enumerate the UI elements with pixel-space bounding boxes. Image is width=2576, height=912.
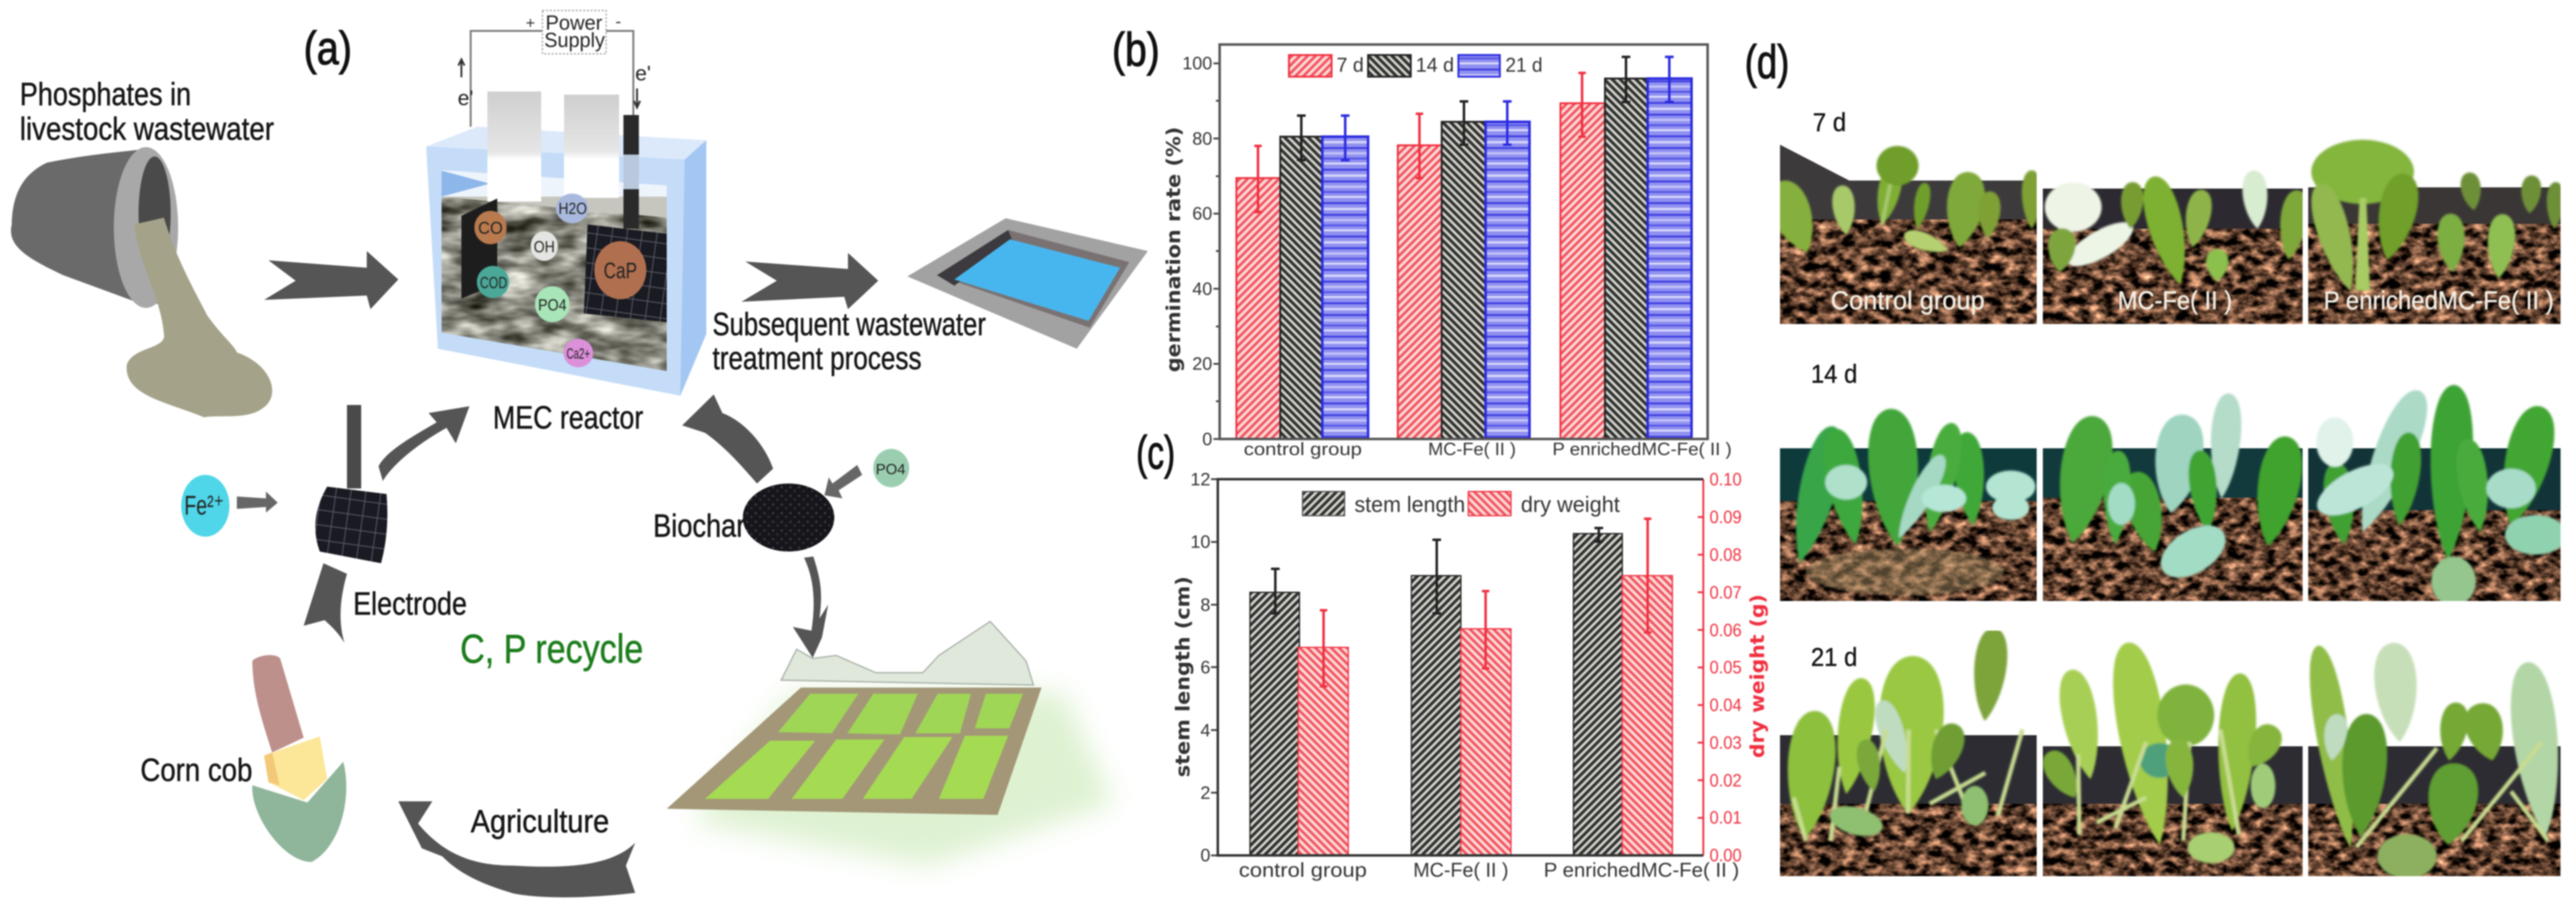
molecule: Ca2+: Ca2+	[567, 346, 590, 362]
photo: 14 d MC-Fe(II)	[2043, 393, 2308, 601]
photo: 14 d P enriched MC-Fe(II)	[2308, 383, 2567, 606]
plot frame	[1220, 45, 1708, 439]
power supply and wires	[458, 11, 651, 127]
molecule: COD	[477, 266, 509, 298]
photo: 21 d P enriched MC-Fe(II)	[2303, 641, 2568, 879]
panel label (d): (d)	[1745, 36, 1789, 88]
power supply and wires: Power	[546, 11, 602, 34]
bars: P enriched MC-Fe(II)	[1573, 519, 1672, 855]
legend: 21 d	[1505, 54, 1543, 76]
panel label (c): (c)	[1136, 427, 1175, 479]
legend: stem length	[1354, 492, 1465, 517]
x axis labels	[1244, 440, 1732, 459]
right y axis in red: 0.06	[1709, 621, 1742, 641]
y axis ticks: 60	[1192, 204, 1212, 224]
right y axis in red: 0.09	[1709, 508, 1742, 527]
left y axis ticks	[1191, 470, 1218, 866]
icon: corn cob	[252, 655, 346, 862]
icon: treatment pond	[907, 218, 1148, 349]
legend: 14 d	[1416, 54, 1454, 76]
icon: Fe2+ ion: Fe²⁺	[184, 490, 224, 521]
molecule: CaP: CaP	[604, 258, 637, 283]
icon: Fe2+ ion	[181, 475, 229, 537]
photo: 21 d control group	[1780, 626, 2037, 876]
bars: control group	[1236, 116, 1368, 439]
label: subsequent wastewater treatment process: treatment process	[712, 341, 922, 377]
arrow: Fe2+ to electrode	[237, 492, 278, 513]
label: 7 d: 7 d	[1813, 108, 1846, 137]
caption: MC-Fe( II )	[2118, 286, 2232, 315]
bars: MC-Fe(II)	[1398, 101, 1530, 439]
legend: dry weight	[1521, 492, 1620, 517]
y axis ticks: 0	[1202, 430, 1212, 450]
molecule: COD: COD	[480, 273, 507, 292]
x axis labels: control group	[1244, 440, 1362, 459]
bars: control group	[1250, 569, 1348, 855]
left y axis ticks: 4	[1200, 721, 1210, 741]
label: MEC reactor: MEC reactor	[493, 400, 643, 436]
right y axis in red: 0.07	[1709, 583, 1742, 603]
label: phosphates in livestock wastewater: livestock wastewater	[20, 111, 274, 147]
molecule: CO2	[474, 211, 507, 244]
legend	[1303, 492, 1620, 517]
icon: biochar	[743, 484, 834, 552]
arrow: biochar to field	[793, 556, 828, 658]
molecule: H2O	[556, 194, 588, 223]
right y axis in red: 0.00	[1709, 846, 1742, 866]
caption: P enrichedMC-Fe( II )	[2324, 286, 2554, 315]
panel: (b) germination rate chart	[1112, 23, 1732, 459]
label: phosphates in livestock wastewater	[20, 77, 274, 147]
right y axis in red: 0.04	[1709, 696, 1742, 715]
power supply and wires: Supply	[544, 28, 605, 51]
icon: PO4 ion	[873, 449, 909, 487]
icon: mesh electrode	[315, 405, 387, 563]
photo: 7 d MC-Fe(II)	[2043, 169, 2312, 324]
left y axis ticks: 6	[1200, 658, 1210, 678]
icon: wastewater pipe	[11, 147, 272, 417]
left y axis ticks: 12	[1191, 470, 1210, 490]
photo: 21 d MC-Fe(II)	[2037, 639, 2303, 876]
arrow: electrode to reactor	[379, 406, 469, 481]
right y axis in red: 0.02	[1709, 771, 1742, 791]
left y axis ticks: 2	[1200, 783, 1210, 803]
label: phosphates in livestock wastewater: Phosphates in	[20, 77, 191, 113]
photo: 14 d control group	[1780, 407, 2037, 601]
molecule: OH	[531, 231, 558, 261]
arrow: reactor to biochar	[682, 394, 773, 484]
molecule: Ca2+	[563, 339, 593, 367]
left y axis ticks: 10	[1191, 532, 1210, 552]
right y axis in red: 0.05	[1709, 658, 1742, 678]
y axis ticks	[1183, 54, 1220, 450]
label: C, P recycle: C, P recycle	[460, 626, 643, 671]
icon: MEC reactor tank	[426, 92, 706, 396]
panel: (a) MEC recycling schematic	[11, 11, 1148, 897]
right y axis in red: 0.01	[1709, 808, 1742, 828]
right y axis in red: 0.10	[1709, 470, 1742, 490]
molecule: CaP	[594, 241, 646, 299]
molecule: OH: OH	[534, 237, 555, 256]
y axis ticks: 100	[1183, 54, 1212, 74]
photo: 7 d P enriched MC-Fe(II)	[2304, 140, 2565, 324]
x axis labels: MC-Fe( II )	[1428, 440, 1516, 459]
label: 21 d: 21 d	[1811, 642, 1857, 671]
legend	[1289, 54, 1543, 77]
arrow: corn cob to electrode	[304, 563, 347, 643]
arrow: PO4 to biochar	[824, 465, 862, 498]
power supply and wires: e'	[458, 87, 473, 110]
label: 14 d: 14 d	[1811, 359, 1857, 388]
x axis labels: MC-Fe( II )	[1413, 859, 1508, 881]
right y axis in red: 0.03	[1709, 733, 1742, 753]
x axis labels: control group	[1239, 859, 1367, 881]
left y axis ticks: 8	[1200, 595, 1210, 615]
label: biochar: Biochar	[653, 508, 745, 544]
bars: MC-Fe(II)	[1411, 540, 1511, 855]
molecule: H2O: H2O	[558, 199, 587, 218]
left y axis title: stem length (cm)	[1172, 576, 1194, 777]
label: subsequent wastewater treatment process: Subsequent wastewater	[712, 307, 986, 343]
icon: farm field with mountains	[667, 621, 1113, 866]
right y axis in red: 0.08	[1709, 545, 1742, 565]
right y axis in red	[1696, 470, 1742, 866]
panel label (a): (a)	[304, 22, 352, 75]
y axis ticks: 40	[1192, 279, 1212, 299]
y axis ticks: 20	[1192, 354, 1212, 374]
panel: (d) seedling photo grid	[1745, 36, 2568, 879]
panel: (c) stem length and dry weight chart	[1136, 427, 1769, 881]
x axis labels	[1239, 859, 1739, 881]
label: corn cob: Corn cob	[140, 752, 252, 788]
left y axis ticks: 0	[1200, 846, 1210, 866]
caption: Control group	[1831, 286, 1985, 315]
molecule: PO4	[535, 286, 570, 322]
y axis title: germination rate (%)	[1163, 127, 1185, 372]
x axis labels: P enrichedMC-Fe( II )	[1552, 440, 1732, 459]
panel label (b): (b)	[1112, 23, 1160, 76]
molecule: CO2: CO	[478, 218, 503, 237]
label: subsequent wastewater treatment process	[712, 307, 986, 377]
molecule: PO4: PO4	[538, 296, 567, 314]
arrow: agriculture to corn cob	[398, 801, 635, 897]
label: agriculture: Agriculture	[471, 804, 609, 840]
x axis labels: P enrichedMC-Fe( II )	[1544, 859, 1739, 881]
arrow: into reactor	[264, 251, 398, 309]
label: electrode: Electrode	[353, 586, 467, 622]
right y axis title: dry weight (g)	[1747, 594, 1769, 758]
plot frame	[1218, 479, 1703, 856]
power supply and wires: +	[526, 14, 535, 32]
power supply and wires: -	[615, 12, 621, 31]
icon: PO4 ion: PO4	[876, 461, 905, 478]
power supply and wires: e'	[635, 62, 651, 85]
y axis ticks: 80	[1192, 129, 1212, 149]
bars: P enriched MC-Fe(II)	[1560, 57, 1692, 439]
photo: 7 d control group	[1760, 145, 2042, 324]
arrow: to subsequent treatment	[742, 253, 878, 309]
legend: 7 d	[1337, 54, 1364, 76]
